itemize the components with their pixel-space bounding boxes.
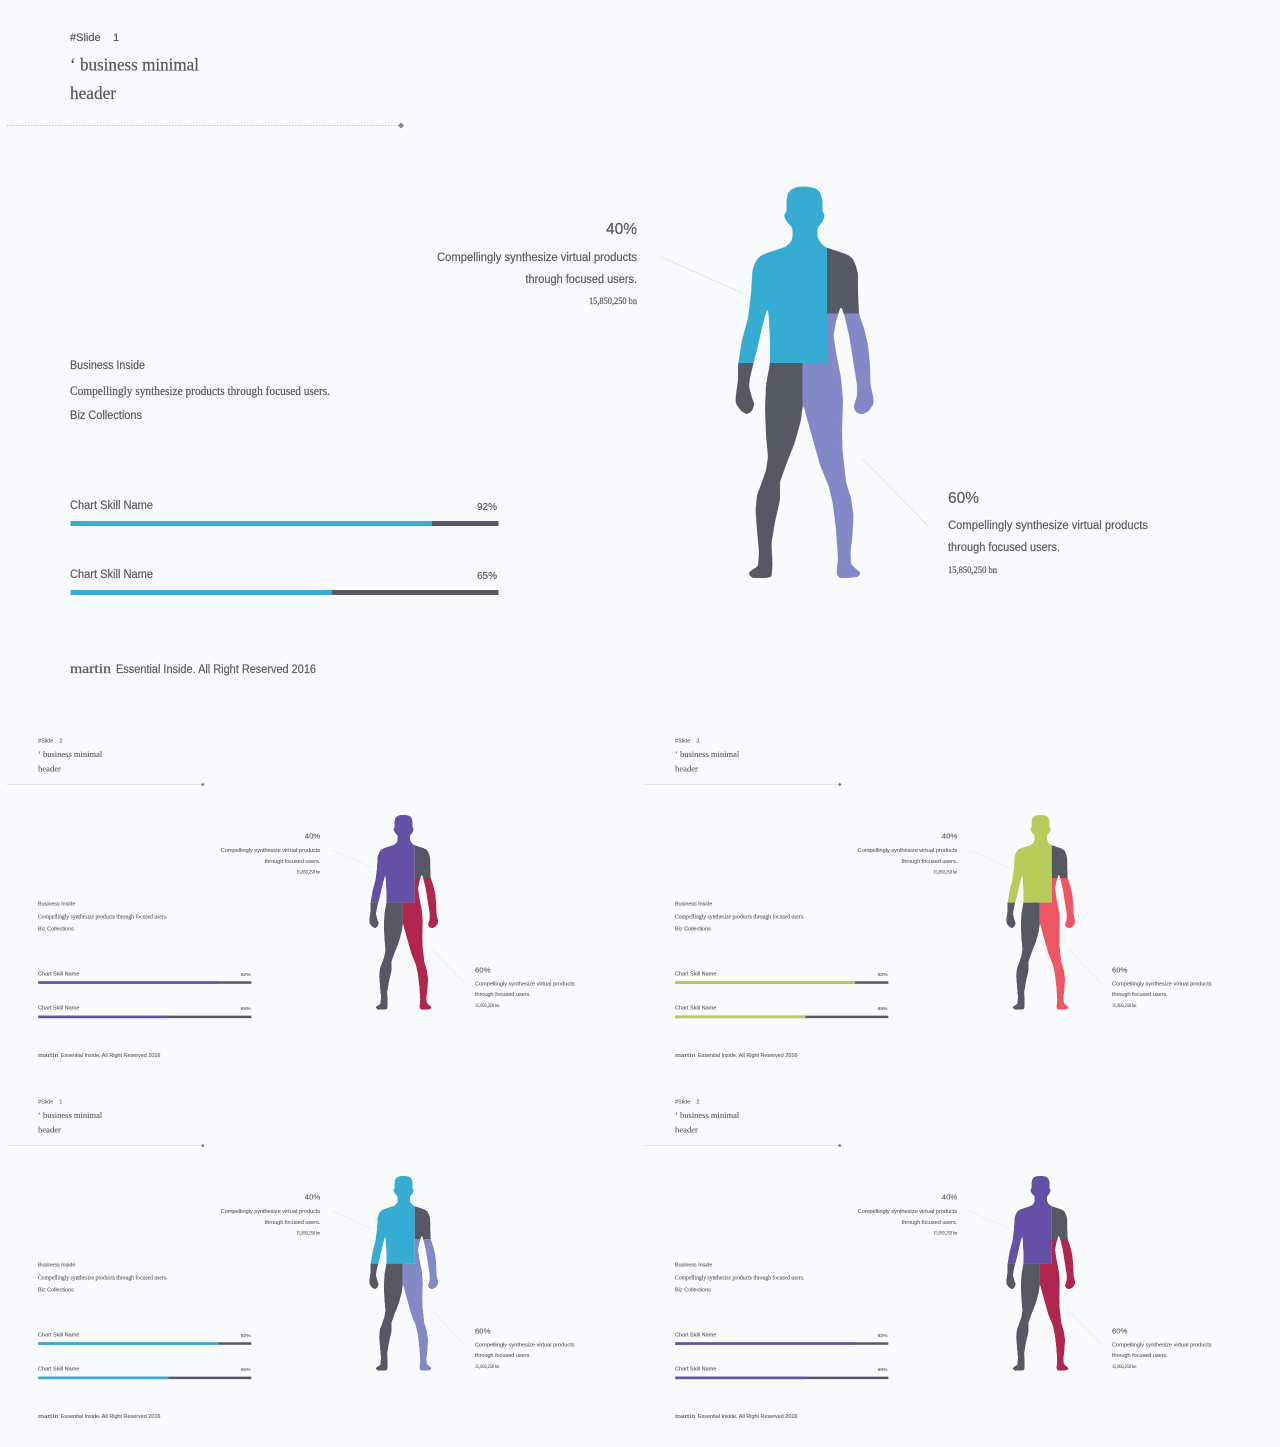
text block: business inside: Business Inside xyxy=(70,360,145,372)
callout: 40%: Compellingly synthesize virtual products xyxy=(858,848,957,854)
slide header: ‘ business minimal xyxy=(675,1110,740,1120)
callout: 60% xyxy=(475,1326,575,1370)
callout: 60%: 60% xyxy=(1112,1326,1128,1335)
panel: slide 2 small purple xyxy=(644,1099,1212,1420)
bar chart: skill 92% xyxy=(675,971,888,984)
text block xyxy=(675,1263,805,1294)
bar chart: skill 65% xyxy=(38,1367,251,1379)
bar chart: skill 65%: 65% xyxy=(241,1006,251,1012)
bar chart: skill 65%: Chart Skill Name xyxy=(38,1367,79,1373)
callout: 60%: Compellingly synthesize virtual products xyxy=(1112,981,1212,987)
callout: 60%: 15,850,250 bn xyxy=(1112,1004,1137,1009)
footer: martin xyxy=(38,1413,59,1420)
callout: 60%: 60% xyxy=(475,1326,491,1335)
bar chart: skill 92%: Chart Skill Name xyxy=(38,1332,79,1338)
bar chart: skill 92%: 92% xyxy=(477,502,497,513)
callout: 40%: Compellingly synthesize virtual products xyxy=(221,1209,320,1215)
human figure xyxy=(369,1176,438,1371)
callout: 40% xyxy=(221,1192,321,1236)
text block: Business Inside xyxy=(675,1263,712,1269)
callout: 60% xyxy=(475,965,575,1009)
connector line xyxy=(432,950,465,984)
panel: slide 3 green xyxy=(644,738,1212,1059)
heading: title line 1: ‘ business minimal xyxy=(70,54,199,74)
bar chart: skill 92%: 92% xyxy=(878,972,888,978)
bar chart: skill 92% xyxy=(70,500,498,526)
text block: Compellingly synthesize products through focused users. xyxy=(675,914,805,921)
callout: 60% xyxy=(948,490,1148,576)
bar chart: skill 65% xyxy=(675,1006,888,1018)
bar chart: skill 92% xyxy=(675,1332,888,1345)
panel: main slide 1 xyxy=(7,32,1148,676)
text block: Business Inside xyxy=(675,902,712,908)
callout: 60%: through focused users. xyxy=(475,1353,531,1359)
callout: 60%: Compellingly synthesize virtual products xyxy=(948,520,1148,532)
footer: Essential Inside. All Right Reserved 2016 xyxy=(116,664,316,676)
connector line xyxy=(1069,950,1102,984)
callout: 40%: Compellingly synthesize virtual products xyxy=(221,848,320,854)
callout: 60%: 60% xyxy=(475,965,491,974)
slide header: header xyxy=(675,763,698,773)
text block: Business Inside xyxy=(38,902,75,908)
bar chart: skill 92%: Chart Skill Name xyxy=(70,500,153,512)
slide header: ‘ business minimal xyxy=(675,749,740,759)
callout: 40%: 40% xyxy=(305,831,320,840)
callout: 40%: Compellingly synthesize virtual products xyxy=(437,252,637,264)
bar chart: skill 92%: Chart Skill Name xyxy=(675,971,716,977)
callout: 40%: Compellingly synthesize virtual products xyxy=(858,1209,957,1215)
footer: martin xyxy=(38,1052,59,1059)
callout: 40%: 15,850,250 bn xyxy=(296,870,321,875)
text block: Biz Collections xyxy=(38,927,74,933)
header divider with diamond xyxy=(7,122,404,128)
connector line: 40% callout to figure xyxy=(661,257,742,293)
slide header: #Slide xyxy=(675,1099,690,1105)
callout: 60%: Compellingly synthesize virtual products xyxy=(475,1342,575,1348)
callout: 40%: through focused users. xyxy=(902,859,958,865)
slide header xyxy=(644,1099,842,1147)
bar chart: skill 65% xyxy=(675,1367,888,1379)
bar chart: skill 92%: 92% xyxy=(878,1333,888,1339)
text block: business inside xyxy=(70,360,330,422)
slide header: ‘ business minimal xyxy=(38,1110,103,1120)
connector line xyxy=(432,1311,465,1345)
connector line xyxy=(969,850,1009,868)
connector line xyxy=(332,1211,372,1229)
callout: 40% xyxy=(221,831,321,875)
text block xyxy=(675,902,805,933)
heading: slide label: 1 xyxy=(113,32,119,44)
slide header: #Slide xyxy=(675,738,690,744)
text block: Compellingly synthesize products through focused users. xyxy=(38,914,168,921)
bar chart: skill 65% xyxy=(70,569,498,595)
panel: slide 1 small blue xyxy=(7,1099,575,1420)
callout: 40%: through focused users. xyxy=(526,274,637,286)
footer: Essential Inside. All Right Reserved 2016 xyxy=(61,1414,160,1420)
connector line xyxy=(1069,1311,1102,1345)
callout: 40% xyxy=(437,221,637,307)
callout: 60%: 15,850,250 bn xyxy=(948,566,997,576)
bar chart: skill 65%: Chart Skill Name xyxy=(675,1367,716,1373)
callout: 40% xyxy=(858,1192,958,1236)
connector line xyxy=(332,850,372,868)
panel: slide 2 purple xyxy=(7,738,575,1059)
connector line xyxy=(969,1211,1009,1229)
footer: Essential Inside. All Right Reserved 2016 xyxy=(698,1053,797,1059)
bar chart: skill 92%: 92% xyxy=(241,1333,251,1339)
callout: 60%: Compellingly synthesize virtual products xyxy=(1112,1342,1212,1348)
slide header: #Slide xyxy=(38,1099,53,1105)
heading: title line 2: header xyxy=(70,83,116,103)
footer: martin xyxy=(70,661,111,676)
slide header xyxy=(644,738,842,786)
callout: 60%: 15,850,250 bn xyxy=(1112,1365,1137,1370)
footer xyxy=(70,661,316,676)
human figure xyxy=(369,815,438,1010)
text block: Biz Collections xyxy=(38,1288,74,1294)
callout: 40%: 40% xyxy=(942,831,957,840)
bar chart: skill 92%: Chart Skill Name xyxy=(38,971,79,977)
bar chart: skill 92% xyxy=(38,971,251,984)
slide header: 1 xyxy=(59,1099,62,1105)
slide header: header xyxy=(675,1124,698,1134)
footer xyxy=(675,1052,797,1059)
bar chart: skill 65%: Chart Skill Name xyxy=(675,1006,716,1012)
callout: 40%: 15,850,250 bn xyxy=(296,1231,321,1236)
callout: 40%: through focused users. xyxy=(265,859,321,865)
footer: martin xyxy=(675,1413,696,1420)
connector line: 60% callout to figure xyxy=(862,458,928,526)
callout: 40%: 40% xyxy=(942,1192,957,1201)
text block: Business Inside xyxy=(38,1263,75,1269)
footer: Essential Inside. All Right Reserved 2016 xyxy=(698,1414,797,1420)
callout: 60%: through focused users. xyxy=(475,992,531,998)
callout: 60%: 15,850,250 bn xyxy=(475,1365,500,1370)
slide header xyxy=(7,738,205,786)
slide header: 2 xyxy=(696,1099,699,1105)
bar chart: skill 65%: 65% xyxy=(878,1367,888,1373)
callout: 60%: through focused users. xyxy=(1112,1353,1168,1359)
slide header: 3 xyxy=(696,738,699,744)
text block: Compellingly synthesize products through focused users. xyxy=(675,1275,805,1282)
text block: Biz Collections xyxy=(675,1288,711,1294)
bar chart: skill 65% xyxy=(38,1006,251,1018)
callout: 40% xyxy=(858,831,958,875)
callout: 60%: 15,850,250 bn xyxy=(475,1004,500,1009)
callout: 60%: through focused users. xyxy=(948,542,1060,554)
slide header: #Slide xyxy=(38,738,53,744)
bar chart: skill 65%: 65% xyxy=(878,1006,888,1012)
callout: 40%: 15,850,250 bn xyxy=(933,1231,958,1236)
callout: 40%: 15,850,250 bn xyxy=(589,297,637,307)
footer: martin xyxy=(675,1052,696,1059)
callout: 60% xyxy=(1112,965,1212,1009)
callout: 60% xyxy=(1112,1326,1212,1370)
human figure xyxy=(1006,1176,1075,1371)
bar chart: skill 65%: Chart Skill Name xyxy=(70,569,153,581)
callout: 40%: through focused users. xyxy=(902,1220,958,1226)
callout: 60%: Compellingly synthesize virtual products xyxy=(475,981,575,987)
slide header: ‘ business minimal xyxy=(38,749,103,759)
callout: 60%: 60% xyxy=(1112,965,1128,974)
slide header: header xyxy=(38,763,61,773)
footer xyxy=(675,1413,797,1420)
human figure xyxy=(736,186,874,578)
bar chart: skill 92%: 92% xyxy=(241,972,251,978)
bar chart: skill 65%: 65% xyxy=(477,571,497,582)
callout: 40%: 40% xyxy=(305,1192,320,1201)
bar chart: skill 92%: Chart Skill Name xyxy=(675,1332,716,1338)
slide header xyxy=(7,1099,205,1147)
text block xyxy=(38,1263,168,1294)
text block xyxy=(38,902,168,933)
footer xyxy=(38,1413,160,1420)
text block: Compellingly synthesize products through focused users. xyxy=(38,1275,168,1282)
callout: 60%: 60% xyxy=(948,490,979,507)
callout: 40%: 40% xyxy=(606,221,637,238)
text block: business inside: Compellingly synthesize products through focused users. xyxy=(70,384,330,398)
bar chart: skill 65%: 65% xyxy=(241,1367,251,1373)
slide header: header xyxy=(38,1124,61,1134)
bar chart: skill 92% xyxy=(38,1332,251,1345)
footer: Essential Inside. All Right Reserved 2016 xyxy=(61,1053,160,1059)
slide header: 2 xyxy=(59,738,62,744)
text block: business inside: Biz Collections xyxy=(70,410,142,422)
callout: 60%: through focused users. xyxy=(1112,992,1168,998)
callout: 40%: through focused users. xyxy=(265,1220,321,1226)
bar chart: skill 65%: Chart Skill Name xyxy=(38,1006,79,1012)
text block: Biz Collections xyxy=(675,927,711,933)
heading: slide label: #Slide xyxy=(70,32,101,44)
callout: 40%: 15,850,250 bn xyxy=(933,870,958,875)
footer xyxy=(38,1052,160,1059)
human figure xyxy=(1006,815,1075,1010)
